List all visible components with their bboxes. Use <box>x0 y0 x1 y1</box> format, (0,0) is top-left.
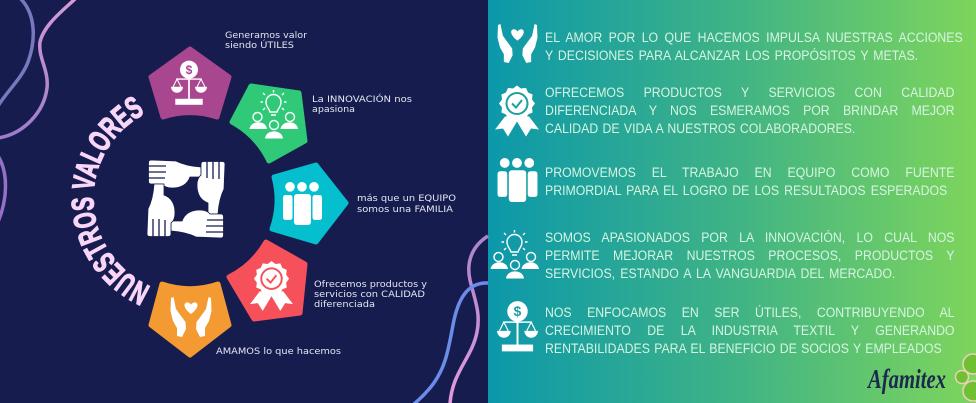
decorative waves right <box>414 236 488 403</box>
text block: calidad: DIFERENCIADA Y NOS ESMERAMOS POR BRINDAR MEJOR <box>545 103 954 118</box>
text block: calidad: OFRECEMOS PRODUCTOS Y SERVICIOS CON CALIDAD <box>545 85 954 100</box>
text block: amor: EL AMOR POR LO QUE HACEMOS IMPULSA NUESTRAS ACCIONES <box>545 30 963 45</box>
text block: amor: Y DECISIONES PARA ALCANZAR LOS PROPÓSITOS Y METAS. <box>545 48 918 63</box>
icon: team (right) <box>498 158 537 202</box>
panel: navy background <box>0 0 488 403</box>
label: calidad: Ofrecemos productos y <box>314 280 428 290</box>
panel: equipo pentagon <box>272 165 346 242</box>
heading: nuestros valores: NUESTROS VALORES <box>71 96 150 306</box>
icon: team <box>283 182 322 225</box>
label: equipo: somos una FAMILIA <box>357 205 454 215</box>
text block: innovacion: SOMOS APASIONADOS POR LA INNOVACIÓN, LO CUAL NOS <box>545 230 954 245</box>
panel: innovacion pentagon <box>232 86 305 161</box>
logo: afamitex <box>866 354 976 401</box>
decorative waves left <box>0 0 76 222</box>
panel: amor pentagon <box>151 284 229 355</box>
panel: calidad pentagon <box>229 242 305 319</box>
label: equipo <box>357 194 456 215</box>
label: equipo: más que un EQUIPO <box>357 194 456 204</box>
icon: award (right) <box>495 86 539 136</box>
label: innovacion: La INNOVACIÓN nos <box>312 93 412 105</box>
label: utiles: Generamos valor <box>225 31 307 41</box>
text block: equipo: PROMOVEMOS EL TRABAJO EN EQUIPO COMO FUENTE <box>545 165 954 180</box>
panel: gradient background <box>488 0 976 403</box>
label: innovacion: apasiona <box>312 105 355 115</box>
text block: innovacion: PERMITE MEJORAR NUESTROS PROCESOS, PRODUCTOS Y <box>545 248 954 263</box>
icon: hands with heart <box>170 297 212 337</box>
label: utiles <box>225 31 307 51</box>
icon: four joined hands <box>147 160 225 238</box>
icon: award <box>250 261 293 311</box>
icon: clover <box>956 354 976 401</box>
text block: equipo: PRIMORDIAL PARA EL LOGRO DE LOS RESULTADOS ESPERADOS <box>545 183 947 198</box>
label: innovacion <box>312 93 412 115</box>
label: calidad <box>314 280 428 310</box>
text block: utiles <box>545 305 954 356</box>
icon: hands with heart (right) <box>498 24 537 63</box>
label: calidad: diferenciada <box>314 300 375 310</box>
text block: amor <box>545 30 963 63</box>
icon: scale <box>171 61 207 105</box>
logo: afamitex: Afamitex <box>866 364 946 394</box>
text block: utiles: RENTABILIDADES PARA EL BENEFICIO DE SOCIOS Y EMPLEADOS <box>545 341 942 356</box>
text block: equipo <box>545 165 954 198</box>
text block: calidad <box>545 85 954 136</box>
text block: utiles: NOS ENFOCAMOS EN SER ÚTILES, CONTRIBUYENDO AL <box>545 305 954 320</box>
text block: innovacion <box>545 230 954 281</box>
icon: innovation team <box>250 90 298 138</box>
label: calidad: servicios con CALIDAD <box>314 290 425 300</box>
text block: calidad: CALIDAD DE VIDA A NUESTROS COLABORADORES. <box>545 121 855 136</box>
text block: innovacion: SERVICIOS, ESTANDO A LA VANGUARDIA DEL MERCADO. <box>545 266 895 281</box>
text block: utiles: CRECIMIENTO DE LA INDUSTRIA TEXTIL Y GENERANDO <box>545 323 954 338</box>
panel: utiles pentagon <box>151 49 229 117</box>
icon: innovation team (right) <box>490 230 539 278</box>
label: utiles: siendo ÚTILES <box>225 39 294 51</box>
icon: scale (right) <box>497 301 538 351</box>
label: amor: AMAMOS lo que hacemos <box>216 347 341 357</box>
